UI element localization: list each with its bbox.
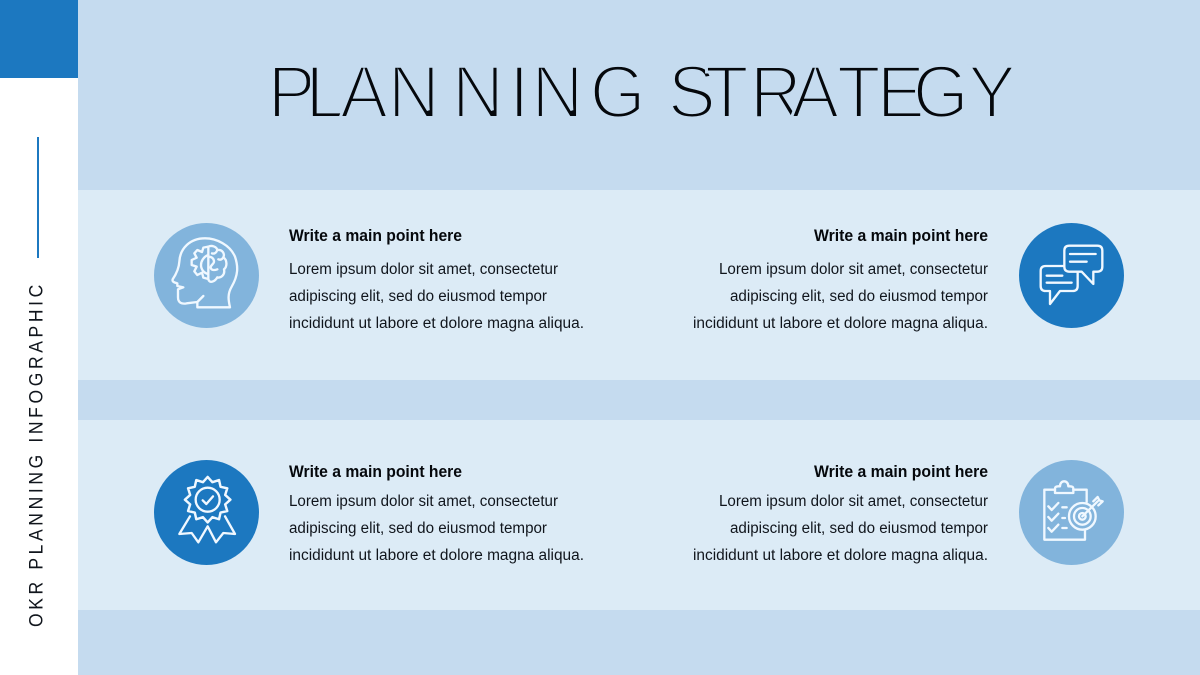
sidebar [0, 0, 78, 675]
text block: bottom left: Lorem ipsum dolor sit amet, consectetur [289, 493, 558, 510]
text block: bottom right [693, 462, 988, 564]
text block: bottom left: incididunt ut labore et dolore magna aliqua. [289, 547, 584, 564]
icon: clipboard with target [1019, 460, 1124, 565]
text block: bottom left: Write a main point here [289, 462, 462, 481]
text block: top left [289, 226, 584, 332]
text block: bottom left [289, 462, 584, 564]
text block: top left: Write a main point here [289, 226, 462, 245]
text block: bottom left: adipiscing elit, sed do eiusmod tempor [289, 520, 547, 537]
panel: top band [78, 190, 1200, 380]
text block: top left: Lorem ipsum dolor sit amet, consectetur [289, 261, 558, 278]
text block: top left: incididunt ut labore et dolore magna aliqua. [289, 315, 584, 332]
icon: award ribbon [154, 460, 259, 565]
text block: top right: incididunt ut labore et dolore magna aliqua. [693, 315, 988, 332]
icon: head with brain and gear [154, 223, 259, 328]
text block: top right: adipiscing elit, sed do eiusmod tempor [730, 288, 988, 305]
sidebar: OKR PLANNING INFOGRAPHIC [25, 285, 47, 627]
text block: top right: Write a main point here [814, 226, 988, 245]
text block: top right: Lorem ipsum dolor sit amet, consectetur [719, 261, 988, 278]
icon: speech bubbles [1019, 223, 1124, 328]
panel: bottom band [78, 420, 1200, 610]
text block: bottom right: adipiscing elit, sed do eiusmod tempor [730, 520, 988, 537]
text block: bottom right: Lorem ipsum dolor sit amet, consectetur [719, 493, 988, 510]
text block: bottom right: incididunt ut labore et dolore magna aliqua. [693, 547, 988, 564]
text block: top left: adipiscing elit, sed do eiusmod tempor [289, 288, 547, 305]
title: PLANNING STRATEGY [268, 52, 1016, 134]
text block: bottom right: Write a main point here [814, 462, 988, 481]
text block: top right [693, 226, 988, 332]
